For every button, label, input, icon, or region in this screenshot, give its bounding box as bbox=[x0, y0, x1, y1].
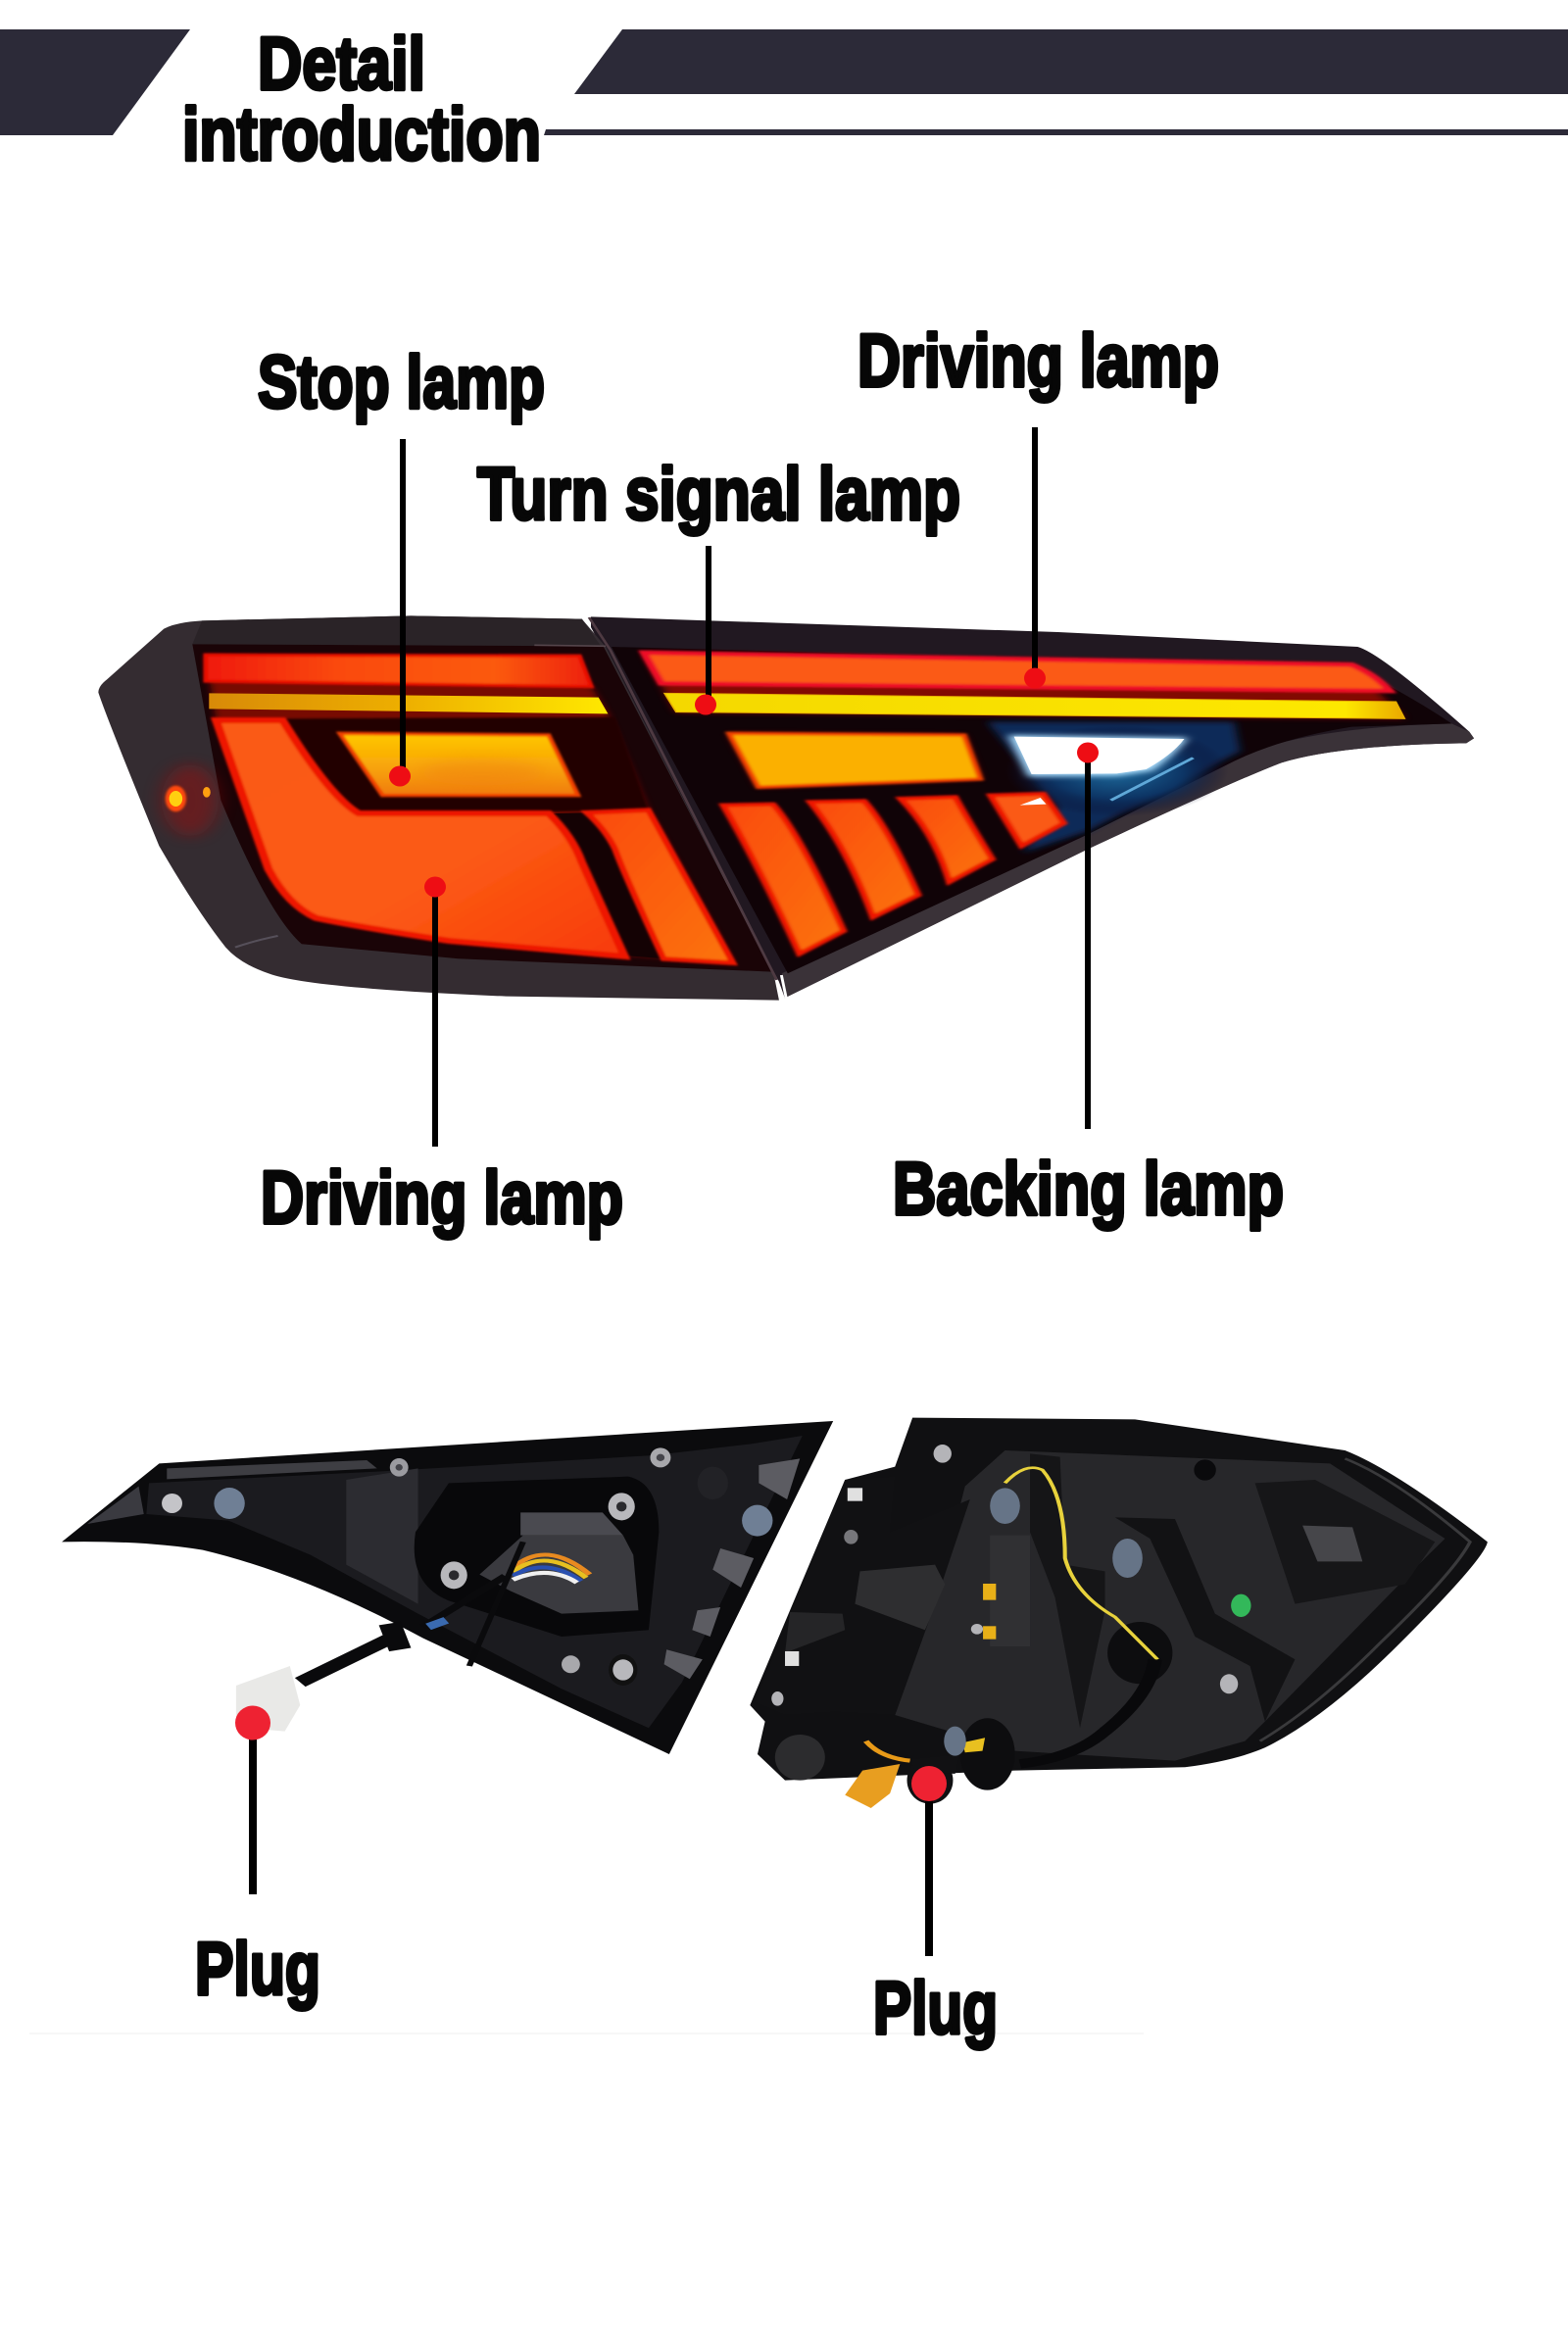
amber stop lamp bbox=[340, 733, 578, 796]
left corner face bbox=[87, 1487, 144, 1524]
upper housing shade bbox=[192, 615, 601, 646]
outer housing bbox=[98, 615, 779, 1001]
red bar bbox=[206, 655, 591, 687]
red halo bbox=[206, 655, 733, 963]
panel: lit tail lamp, outer section (left) bbox=[98, 615, 786, 1001]
green sticker bbox=[1231, 1594, 1251, 1617]
dark gap around stop lamp bbox=[282, 717, 649, 813]
module clips bbox=[983, 1584, 996, 1640]
blue-grey plugs bbox=[214, 1488, 772, 1537]
red driving bar bbox=[644, 653, 1390, 691]
vertical channel bbox=[1030, 1453, 1105, 1728]
body bbox=[750, 1418, 1488, 1781]
bracket windows bbox=[785, 1488, 862, 1666]
header: right slanted band bbox=[574, 29, 1568, 94]
housing bbox=[895, 1450, 1445, 1761]
callout: stop lamp: Stop lamp bbox=[258, 341, 545, 424]
inner dark lens bbox=[192, 644, 772, 972]
right dark well bbox=[1255, 1480, 1435, 1604]
amber stop panel bbox=[729, 733, 980, 787]
callout: turn signal lamp bbox=[477, 453, 960, 715]
red halo bbox=[644, 653, 1404, 787]
callout: backing lamp bbox=[893, 743, 1284, 1231]
connector lid bbox=[520, 1512, 623, 1536]
label patch bbox=[1302, 1526, 1362, 1561]
grey bracket face bbox=[855, 1565, 945, 1630]
connector plate bbox=[479, 1536, 638, 1614]
grey upper strip bbox=[167, 1460, 377, 1479]
bracket arm bbox=[785, 1612, 845, 1653]
small side bar bbox=[587, 810, 733, 963]
inner channel bbox=[1115, 1517, 1295, 1722]
seam between lamp sections bbox=[235, 617, 786, 998]
sequential bars bbox=[723, 794, 1064, 954]
side marker glow bbox=[162, 764, 219, 836]
dark bracket bbox=[755, 1477, 970, 1715]
callout: plug right: Plug bbox=[873, 1967, 998, 2050]
backing lamp bbox=[1008, 735, 1193, 801]
blue backing glow bbox=[988, 722, 1240, 853]
callout: driving lamp upper bbox=[858, 319, 1219, 688]
highlight on last bar bbox=[1020, 798, 1047, 806]
callout: driving lamp lower: Driving lamp bbox=[261, 1156, 623, 1240]
title bbox=[182, 23, 541, 176]
blue reflector bbox=[1005, 725, 1228, 816]
yellow bar bbox=[209, 693, 608, 713]
panel: rear of inner lamp section bbox=[62, 1421, 833, 1754]
panel: lit tail lamp, inner section (right) bbox=[591, 616, 1474, 998]
callout: backing lamp: Backing lamp bbox=[893, 1148, 1284, 1231]
callout: stop lamp bbox=[258, 341, 545, 786]
bolts bbox=[771, 1445, 1238, 1706]
fuse module bbox=[990, 1536, 1030, 1646]
body bbox=[62, 1421, 833, 1754]
blue-grey plugs bbox=[944, 1488, 1143, 1756]
main driving lamp bbox=[217, 720, 624, 956]
right edge tabs bbox=[664, 1458, 800, 1679]
lower grey rim bbox=[782, 723, 1474, 998]
title: Detail bbox=[258, 23, 425, 106]
bolts bbox=[162, 1447, 728, 1686]
callout: plug right bbox=[873, 1766, 998, 2050]
yellow turn bar bbox=[664, 693, 1404, 718]
harness bbox=[300, 1542, 523, 1683]
orange plug and wires bbox=[845, 1738, 985, 1808]
grommet plate bbox=[960, 1718, 1015, 1790]
raised rear panel bbox=[146, 1436, 803, 1728]
colored wires bbox=[513, 1554, 590, 1583]
panel: rear of outer lamp section bbox=[750, 1418, 1488, 1808]
callout: plug left: Plug bbox=[195, 1928, 320, 2011]
grey mid panel bbox=[346, 1468, 418, 1604]
header: rule bbox=[544, 129, 1568, 135]
white plug bbox=[236, 1666, 300, 1732]
gasket bbox=[415, 1477, 659, 1637]
inner dark lens bbox=[612, 647, 1451, 973]
callout: plug left bbox=[195, 1705, 320, 2011]
outer housing bbox=[591, 616, 1474, 998]
left foot bbox=[775, 1735, 825, 1781]
yellow wire bbox=[1005, 1468, 1157, 1659]
callout: turn signal lamp: Turn signal lamp bbox=[477, 453, 960, 536]
dark gap between lamps bbox=[554, 812, 663, 958]
harness bbox=[1020, 1659, 1155, 1764]
callout: driving lamp upper: Driving lamp bbox=[858, 319, 1219, 403]
title: introduction bbox=[182, 93, 541, 176]
callout: driving lamp lower bbox=[261, 876, 623, 1240]
grommet hole bbox=[1107, 1622, 1172, 1684]
faint seam line bbox=[29, 2033, 1144, 2034]
header: left slanted band bbox=[0, 29, 190, 135]
rim highlight bbox=[1260, 1458, 1470, 1741]
